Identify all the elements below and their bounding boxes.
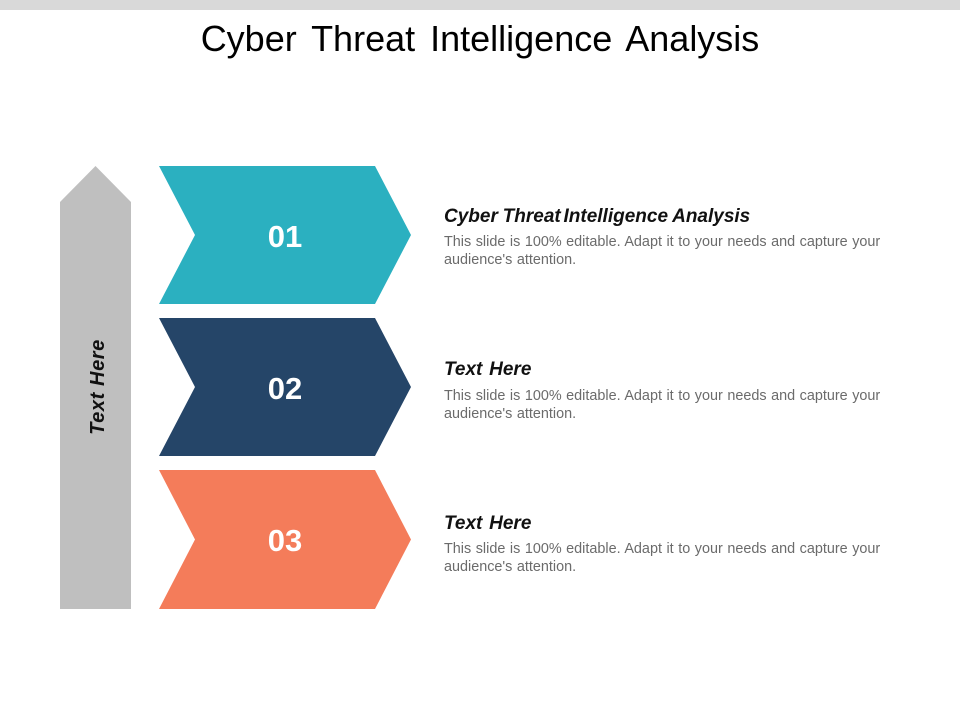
text block 2: audience's attention. (444, 406, 576, 422)
title: Cyber Threat Intelligence Analysis (201, 18, 759, 59)
chevron 01 (159, 166, 411, 304)
arrow: upward grey: Text Here (87, 339, 109, 435)
text block 1 (444, 234, 880, 268)
text block 2 (444, 388, 880, 422)
top bar (0, 0, 960, 10)
chevron 03: 03 (268, 523, 302, 558)
arrow: upward grey (60, 166, 131, 609)
heading 3: Text Here (444, 513, 531, 534)
chevron 02 (159, 318, 411, 456)
text block 3 (444, 541, 880, 575)
chevron 01: 01 (268, 219, 302, 254)
chevron 02: 02 (268, 371, 302, 406)
heading 2: Text Here (444, 359, 531, 380)
text block 3: audience's attention. (444, 559, 576, 575)
text block 1: This slide is 100% editable. Adapt it to your needs and capture your (444, 234, 880, 250)
chevron 03 (159, 470, 411, 609)
heading 1: Cyber Threat Intelligence Analysis (444, 206, 750, 227)
text block 3: This slide is 100% editable. Adapt it to your needs and capture your (444, 541, 880, 557)
text block 2: This slide is 100% editable. Adapt it to your needs and capture your (444, 388, 880, 404)
text block 1: audience's attention. (444, 252, 576, 268)
